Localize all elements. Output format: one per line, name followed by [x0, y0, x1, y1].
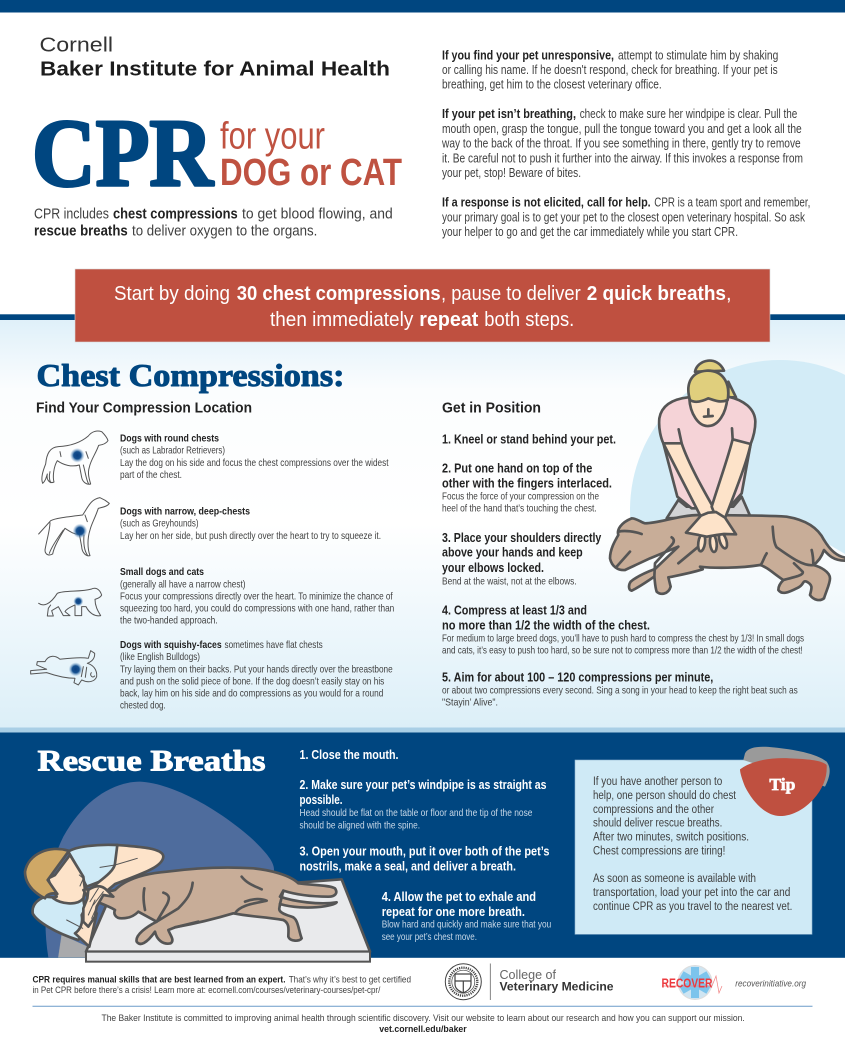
text: Dogs with narrow, deep-chests [120, 505, 250, 517]
text: the two-handed approach. [120, 615, 218, 627]
person [659, 361, 755, 518]
step 5 [442, 670, 798, 709]
footer note: That’s why it’s best to get certified [289, 975, 411, 986]
step 3: nostrils, make a seal, and deliver a breath. [300, 860, 516, 874]
step 2: 2. Make sure your pet’s windpipe is as straight as [300, 778, 547, 792]
step 2: should be aligned with the spine. [300, 819, 420, 831]
footer note: in Pet CPR before there’s a crisis! Learn more at: ecornell.com/courses/veterinary-courses/pet-cpr/ [32, 985, 381, 996]
tip text: Chest compressions are tiring! [593, 845, 725, 857]
illustration: person doing chest compressions on dog [608, 359, 845, 602]
dog [610, 515, 845, 600]
footer note [32, 975, 411, 996]
text: Lay the dog on his side and focus the chest compressions over the widest [120, 457, 389, 469]
step 3: above your hands and keep [442, 546, 583, 560]
text: back, lay him on his side and do compressions as you would for a round [120, 688, 383, 700]
step 2 [300, 778, 547, 831]
tip text [593, 776, 792, 913]
step 2 [442, 462, 612, 515]
step 5: "Stayin’ Alive". [442, 697, 498, 709]
title: CPR for your dog or cat: CPR [32, 100, 215, 206]
logo: College of Veterinary Medicine: College of [500, 968, 557, 982]
tip text: should deliver rescue breaths. [593, 818, 722, 830]
step 4: 4. Allow the pet to exhale and [382, 890, 536, 904]
logo: RECOVER [662, 966, 722, 1000]
text [120, 505, 381, 542]
panel: rescue breaths background [0, 732, 845, 958]
step 2: possible. [300, 793, 342, 807]
tip badge [740, 747, 830, 816]
entry: small dogs and cats [39, 566, 394, 627]
text: sometimes have flat chests [224, 639, 323, 651]
step 1: 1. Close the mouth. [300, 748, 398, 762]
top bar [0, 0, 845, 12]
step 5: 5. Aim for about 100 – 120 compressions per minute, [442, 670, 713, 684]
tip text: compressions and the other [593, 804, 714, 816]
text: what to do first: your pet, stop! Beware of bites. [442, 166, 581, 180]
text [120, 566, 394, 627]
intro text [34, 206, 393, 240]
banner: repeat [419, 309, 479, 331]
logo: Cornell Baker Institute [40, 35, 390, 81]
step 4: repeat for one more breath. [382, 905, 525, 919]
entry: narrow deep chests [39, 498, 381, 556]
footer mission text: vet.cornell.edu/baker [379, 1024, 467, 1035]
tip text: help, one person should do chest [593, 790, 737, 802]
text: Try laying them on their backs. Put your hands directly over the breastbone [120, 663, 393, 675]
step 3: Bend at the waist, not at the elbows. [442, 575, 577, 587]
banner [75, 269, 770, 342]
entry: squishy-faced dogs [31, 639, 393, 712]
step 3 [300, 844, 550, 874]
footer rule [32, 1005, 812, 1007]
banner: 30 chest compressions [237, 283, 441, 305]
title: CPR for your dog or cat: for your [220, 115, 325, 157]
logo: College of Veterinary Medicine: Veterinary Medicine [500, 980, 614, 994]
intro text: CPR includes [34, 206, 109, 223]
blue circle backdrop [630, 360, 845, 554]
step 4: Blow hard and quickly and make sure that you [382, 919, 551, 931]
text: what to do first: your helper to go and get the car immediately while you start CPR. [442, 225, 738, 239]
intro text: rescue breaths [34, 223, 128, 240]
logo: Cornell Baker Institute: Baker Institute for Animal Health [40, 58, 390, 81]
text: chested dog. [120, 700, 166, 712]
text: what to do first: If your pet isn’t breathing, [442, 107, 576, 121]
dog [83, 867, 337, 944]
icon: bulldog on back [31, 651, 97, 685]
step 4 [442, 604, 804, 657]
banner: then immediately [270, 309, 413, 331]
banner: Start by doing [114, 283, 230, 305]
text: what to do first: breathing, get him to the closest veterinary office. [442, 78, 662, 92]
text: (such as Labrador Retrievers) [120, 445, 225, 457]
step 3: your elbows locked. [442, 561, 544, 575]
step 2: Head should be flat on the table or floor and the tip of the nose [300, 807, 533, 819]
text: squeezing too hard, you could do compressions with one hand, rather than [120, 603, 394, 615]
subheading: Get in Position [442, 401, 541, 417]
title: CPR for your dog or cat: DOG or CAT [220, 152, 402, 194]
step 3: 3. Open your mouth, put it over both of the pet’s [300, 844, 550, 858]
pants [58, 935, 87, 957]
panel: rescue breaths steps [300, 748, 551, 943]
logo: College of Veterinary Medicine [500, 968, 614, 994]
text: Dogs with squishy-faces [120, 639, 222, 651]
logo: Cornell Baker Institute: Cornell [40, 35, 113, 57]
text [120, 639, 393, 712]
banner: , pause to deliver [441, 283, 581, 305]
intro text: to get blood flowing, and [242, 206, 393, 223]
step 4: see your pet’s chest move. [382, 931, 477, 943]
header block [32, 35, 810, 240]
panel: find your compression location [31, 401, 394, 712]
icon: narrow-chested dog [39, 498, 109, 556]
entry: round chests [42, 431, 389, 484]
arms and hands [663, 428, 751, 552]
banner: 2 quick breaths [587, 283, 726, 305]
tip text: After two minutes, switch positions. [593, 832, 749, 844]
text: part of the chest. [120, 469, 182, 481]
heading: rescue breaths: Rescue Breaths [38, 745, 266, 778]
icon: round-chested dog [42, 431, 108, 484]
tip badge: Tip [769, 775, 795, 794]
link: recoverinitiative.org: recoverinitiative.org [735, 979, 807, 990]
heading: chest compressions: Chest Compressions: [36, 357, 344, 393]
text: (such as Greyhounds) [120, 518, 198, 530]
text: what to do first [441, 48, 810, 239]
step 2: other with the fingers interlaced. [442, 476, 612, 490]
text: (generally all have a narrow chest) [120, 578, 246, 590]
table [86, 879, 370, 962]
tip text: continue CPR as you travel to the nearest vet. [593, 901, 792, 913]
illustration: rescue breath on table [25, 782, 370, 962]
icon: cat [39, 588, 102, 616]
step 2: heel of the hand that’s touching the chest. [442, 503, 597, 515]
intro text: chest compressions [113, 206, 238, 223]
panel: get in position [442, 401, 804, 709]
tip text: transportation, load your pet into the car and [593, 887, 790, 899]
tip text: If you have another person to [593, 776, 722, 788]
text: (like English Bulldogs) [120, 651, 200, 663]
logo: RECOVER: RECOVER [662, 976, 712, 990]
text [120, 433, 389, 481]
banner: both steps. [484, 309, 574, 331]
person [25, 845, 163, 947]
text: Dogs with round chests [120, 433, 219, 445]
text: what to do first: If you find your pet unresponsive, [442, 48, 614, 62]
subheading: Find Your Compression Location [36, 401, 252, 417]
footer note: CPR requires manual skills that are best learned from an expert. [32, 975, 286, 986]
intro text: to deliver oxygen to the organs. [132, 223, 317, 240]
step 4: 4. Compress at least 1/3 and [442, 604, 587, 618]
tip text: As soon as someone is available with [593, 873, 756, 885]
footer mission text [102, 1013, 745, 1035]
step 4 [382, 890, 551, 943]
text: and push on the solid piece of bone. If the dog doesn’t easily stay on his [120, 675, 384, 687]
chest compressions background [0, 320, 845, 728]
divider [489, 964, 491, 1000]
step 2: 2. Put one hand on top of the [442, 462, 592, 476]
title: CPR for your dog or cat [32, 100, 402, 206]
step 2: Focus the force of your compression on the [442, 491, 599, 503]
step 1: 1. Kneel or stand behind your pet. [442, 432, 616, 446]
logo: Cornell seal [445, 964, 481, 1000]
text: Lay her on her side, but push directly over the heart to try to squeeze it. [120, 530, 381, 542]
step 3 [442, 531, 601, 587]
step 4: no more than 1/2 the width of the chest. [442, 618, 650, 632]
text: what to do first: If a response is not elicited, call for help. [442, 195, 651, 209]
backdrop hill [45, 782, 274, 957]
panel: tip [575, 747, 830, 934]
hand over muzzle [83, 886, 113, 927]
banner: , [726, 283, 732, 305]
footer mission text: The Baker Institute is committed to improving animal health through scientific discovery. Visit our website to learn about our research and how you can support our mission. [102, 1013, 745, 1024]
text: what to do first: attempt to stimulate him by shaking [618, 48, 778, 62]
step 3: 3. Place your shoulders directly [442, 531, 601, 545]
text: Focus your compressions directly over the heart. To minimize the chance of [120, 591, 393, 603]
text: Small dogs and cats [120, 566, 204, 578]
